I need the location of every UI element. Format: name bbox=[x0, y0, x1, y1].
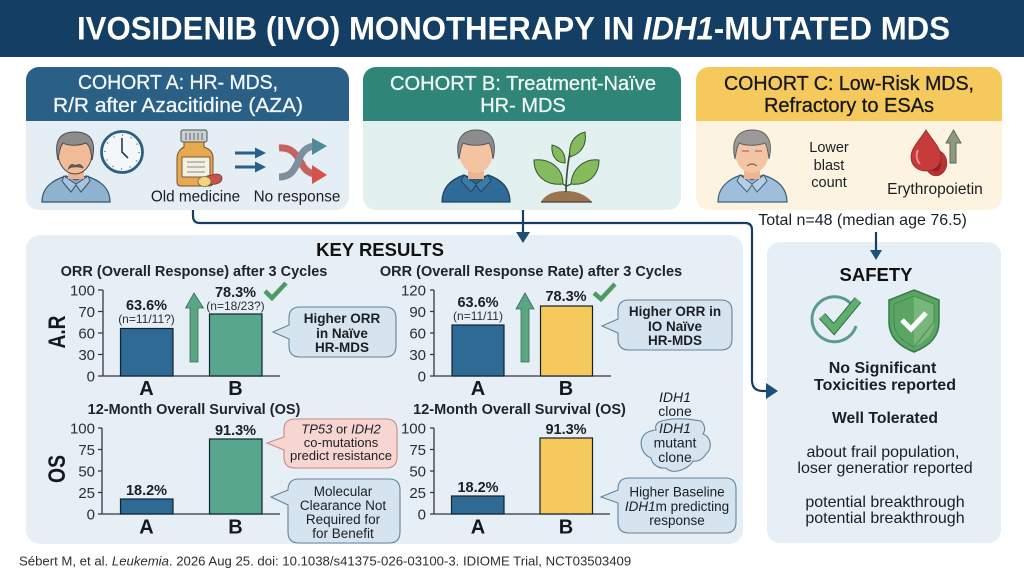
chart: OS left: 91.3% bbox=[215, 423, 256, 439]
callout: higher ORR IO naive bbox=[602, 300, 732, 350]
label: no response: No response bbox=[254, 188, 340, 206]
callout: molecular clearance: Required for bbox=[306, 512, 381, 527]
citation: Sébert M, et al. Leukemia. 2026 Aug 25. doi: 10.1038/s41375-026-03100-3. IDIOME Trial, NCT03503409 bbox=[19, 554, 631, 568]
chart: ORR left: (n=18/23?) bbox=[206, 299, 265, 313]
callout: molecular clearance: for Benefit bbox=[312, 526, 374, 541]
heading: cohort C bbox=[724, 73, 974, 117]
label: lower blast count: Lower bbox=[809, 140, 849, 156]
arrow: increase bbox=[516, 293, 534, 362]
chart: ORR right: 60 bbox=[409, 326, 426, 342]
label: lower blast count: count bbox=[811, 175, 847, 191]
chart: OS right: 12-Month Overall Survival (OS) bbox=[413, 402, 626, 418]
chart: OS right: A bbox=[471, 516, 485, 538]
title banner: IVOSIDENIB (IVO) MONOTHERAPY IN IDH1-MUTATED MDS bbox=[77, 10, 950, 46]
icon: double arrows bbox=[235, 148, 266, 172]
label: erythropoietin: Erythropoietin bbox=[887, 181, 983, 198]
callout: co-mutations: TP53 bbox=[301, 422, 333, 436]
icon: seedling bbox=[534, 132, 599, 202]
label: total n: Total n=48 (median age 76.5) bbox=[758, 212, 967, 229]
chart: OS left: 0 bbox=[87, 506, 95, 524]
heading: cohort B bbox=[390, 73, 656, 117]
chart: ORR left: ORR (Overall Response) after 3 Cycles bbox=[61, 264, 327, 280]
callout: higher baseline: IDH1 bbox=[625, 499, 656, 514]
chart: ORR left: 63.6% bbox=[126, 298, 167, 314]
arrow: cohorts to key results bbox=[516, 210, 530, 243]
callout: molecular clearance bbox=[271, 479, 400, 543]
panel: cohort B bbox=[363, 67, 681, 210]
row label: A.R: A.R bbox=[44, 316, 71, 348]
chart: ORR right: 78.3% bbox=[545, 289, 587, 305]
chart: ORR left: 0 bbox=[87, 368, 95, 386]
connector: cohort A to safety bbox=[193, 210, 778, 399]
label: IDH1 clone: IDH1 bbox=[659, 389, 691, 405]
callout: higher ORR naive bbox=[273, 307, 396, 357]
chart: OS left: 50 bbox=[78, 464, 95, 480]
heading: cohort A: COHORT A: HR- MDS, bbox=[78, 72, 278, 94]
callout: higher baseline bbox=[601, 478, 736, 533]
chart: OS left: 100 bbox=[70, 420, 95, 438]
callout: higher ORR IO naive: IO Naïve bbox=[648, 319, 703, 334]
text: frail population: loser generatior reported bbox=[797, 460, 973, 477]
chart: OS left: 18.2% bbox=[126, 483, 167, 499]
chart: ORR right: 120 bbox=[401, 282, 426, 300]
panel: key results bbox=[26, 235, 743, 544]
callout: higher baseline: response bbox=[649, 513, 705, 528]
text: no significant toxicities: Toxicities reported bbox=[814, 377, 956, 394]
callout: IDH1 mutant clone cloud bbox=[641, 419, 710, 471]
chart: ORR right: 0 bbox=[418, 368, 426, 386]
chart: ORR left: 60 bbox=[78, 326, 95, 342]
chart: ORR left: 70 bbox=[78, 304, 95, 321]
chart: ORR right: ORR (Overall Response Rate) after 3 Cycles bbox=[380, 264, 682, 280]
callout: IDH1 mutant clone cloud: IDH1 bbox=[659, 420, 691, 436]
chart: OS left: 12-Month Overall Survival (OS) bbox=[88, 402, 301, 418]
icon: shuffle arrows bbox=[279, 138, 327, 184]
callout: higher ORR naive: HR-MDS bbox=[315, 340, 369, 355]
chart: OS right: 25 bbox=[409, 485, 426, 502]
heading: cohort A: R/R after Azacitidine (AZA) bbox=[53, 95, 303, 117]
callout: higher ORR naive: Higher ORR bbox=[304, 311, 380, 326]
callout: higher ORR naive: in Naïve bbox=[316, 326, 368, 341]
callout: IDH1 mutant clone cloud: mutant bbox=[654, 434, 697, 450]
icon: elderly person bbox=[718, 130, 787, 202]
heading: key results: KEY RESULTS bbox=[316, 239, 444, 260]
chart: OS right: 0 bbox=[418, 506, 426, 524]
callout: molecular clearance: Molecular bbox=[314, 484, 373, 499]
chart: OS right: B bbox=[559, 516, 573, 538]
chart: ORR right: (n=11/11) bbox=[453, 309, 503, 323]
heading: cohort B: HR- MDS bbox=[480, 95, 566, 117]
text: potential breakthrough: potential breakthrough bbox=[805, 494, 965, 511]
text: potential breakthrough: potential breakthrough bbox=[805, 510, 965, 527]
callout: co-mutations: predict resistance bbox=[290, 448, 392, 463]
arrow: total to safety bbox=[870, 232, 882, 260]
callout: IDH1 mutant clone cloud: clone bbox=[658, 449, 692, 465]
icon: shield bbox=[889, 290, 939, 352]
heading: cohort B: COHORT B: Treatment-Naïve bbox=[390, 73, 656, 95]
chart: ORR right: A bbox=[471, 378, 485, 400]
chart: OS right: 100 bbox=[401, 420, 426, 438]
chart: ORR right bbox=[380, 264, 732, 400]
callout: co-mutations bbox=[267, 419, 397, 468]
icon: up arrow bbox=[946, 130, 961, 163]
chart: OS right bbox=[401, 389, 736, 538]
chart: ORR right: 63.6% bbox=[457, 295, 499, 311]
chart: ORR left bbox=[61, 264, 396, 400]
label: old medicine: Old medicine bbox=[151, 188, 240, 206]
arrow: increase bbox=[186, 293, 204, 362]
icon: older man bbox=[42, 132, 110, 202]
chart: ORR left: 30 bbox=[78, 347, 95, 364]
label: IDH1 clone: clone bbox=[658, 403, 692, 419]
chart: ORR left: A bbox=[139, 378, 154, 400]
icon: check bbox=[265, 283, 286, 298]
icon: younger man bbox=[442, 130, 510, 202]
icon: check circle bbox=[812, 297, 858, 342]
panel: cohort C bbox=[696, 67, 1002, 210]
text: well tolerated: Well Tolerated bbox=[832, 410, 938, 427]
chart: ORR right: B bbox=[559, 378, 573, 400]
chart: ORR right: 30 bbox=[409, 347, 426, 364]
chart: OS right: 75 bbox=[409, 442, 426, 459]
row label: OS: OS bbox=[44, 455, 71, 483]
callout: higher baseline: m predicting bbox=[656, 499, 729, 514]
chart: ORR left: 100 bbox=[70, 282, 95, 300]
chart: OS right: 91.3% bbox=[545, 422, 587, 438]
heading: cohort C: COHORT C: Low-Risk MDS, bbox=[724, 73, 974, 95]
text: no significant toxicities: No Significant bbox=[829, 360, 937, 377]
chart: OS right: 18.2% bbox=[457, 480, 499, 496]
panel: cohort A bbox=[26, 67, 349, 210]
callout: higher baseline: Higher Baseline bbox=[629, 484, 725, 500]
chart: OS left: A bbox=[139, 516, 154, 538]
callout: higher ORR IO naive: HR-MDS bbox=[648, 333, 702, 348]
title banner bbox=[0, 0, 1024, 57]
callout: co-mutations: co-mutations bbox=[304, 435, 379, 450]
text: frail population: about frail population, bbox=[806, 444, 960, 461]
chart: OS left: B bbox=[228, 516, 243, 538]
heading: cohort A bbox=[53, 72, 303, 117]
chart: OS right: 50 bbox=[409, 464, 426, 480]
chart: ORR left: B bbox=[228, 378, 243, 400]
chart: ORR left: 78.3% bbox=[215, 285, 256, 301]
callout: higher ORR IO naive: Higher ORR in bbox=[629, 304, 721, 319]
icon: check bbox=[594, 284, 615, 299]
callout: molecular clearance: Clearance Not bbox=[300, 498, 386, 513]
label: lower blast count: blast bbox=[814, 158, 844, 174]
heading: safety: SAFETY bbox=[840, 264, 913, 285]
heading: cohort C: Refractory to ESAs bbox=[764, 95, 934, 117]
chart: ORR left: (n=11/11?) bbox=[118, 312, 175, 326]
chart: OS left bbox=[70, 402, 400, 543]
callout: co-mutations: or IDH2 bbox=[336, 422, 381, 436]
icon: pill bottle bbox=[177, 130, 222, 186]
chart: OS left: 25 bbox=[78, 485, 95, 502]
chart: ORR right: 90 bbox=[409, 304, 426, 321]
chart: OS left: 75 bbox=[78, 442, 95, 459]
icon: clock bbox=[102, 132, 142, 172]
icon: blood drop and cell bbox=[911, 130, 948, 177]
panel: safety bbox=[767, 242, 1001, 543]
